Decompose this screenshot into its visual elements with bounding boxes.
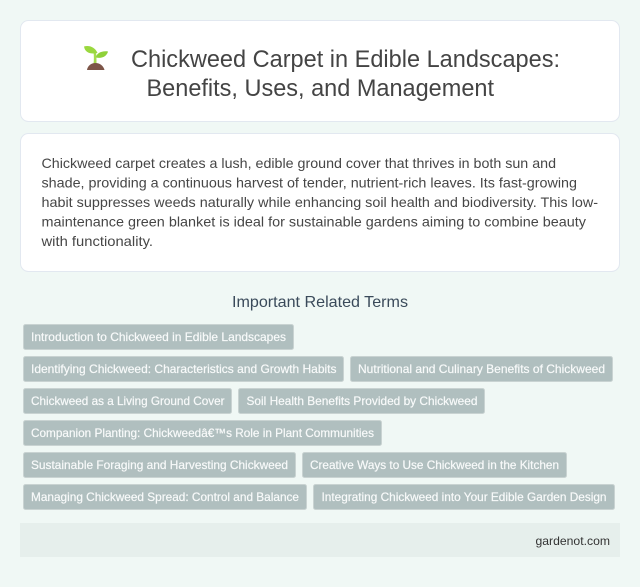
panel: term tags xyxy=(24,324,614,510)
tag: Soil Health Benefits Provided by Chickweed xyxy=(246,394,478,408)
tag xyxy=(238,388,484,414)
description text: habit suppresses weeds naturally while enhancing soil health and biodiversity. This low- xyxy=(42,194,598,210)
description text xyxy=(40,155,598,249)
title text xyxy=(131,46,560,102)
description text: with functionality. xyxy=(40,233,153,249)
description text: maintenance green blanket is ideal for sustainable gardens aiming to combine beauty xyxy=(42,214,586,230)
panel: title card xyxy=(20,20,620,122)
icon: seedling xyxy=(84,46,108,70)
tag: Sustainable Foraging and Harvesting Chickweed xyxy=(31,458,288,472)
tag: Creative Ways to Use Chickweed in the Kitchen xyxy=(310,458,559,472)
footer: gardenot.com xyxy=(536,534,610,548)
tag: Managing Chickweed Spread: Control and Balance xyxy=(31,490,299,504)
tag: Identifying Chickweed: Characteristics and Growth Habits xyxy=(31,362,336,376)
tag xyxy=(24,388,232,414)
footer xyxy=(20,523,620,557)
description text: shade, providing a continuous harvest of tender, nutrient-rich leaves. Its fast-growing xyxy=(42,174,577,190)
title text: Chickweed Carpet in Edible Landscapes: xyxy=(131,46,560,73)
panel: description xyxy=(20,134,620,272)
tag xyxy=(350,356,612,382)
tag xyxy=(24,484,306,510)
tag xyxy=(24,452,296,478)
tag xyxy=(314,484,614,510)
tag: Integrating Chickweed into Your Edible Garden Design xyxy=(322,490,606,504)
tag: Nutritional and Culinary Benefits of Chickweed xyxy=(358,362,605,376)
tag xyxy=(24,420,382,446)
description text: Chickweed carpet creates a lush, edible ground cover that thrives in both sun and xyxy=(42,155,556,171)
title text: Benefits, Uses, and Management xyxy=(146,75,494,102)
heading: related terms: Important Related Terms xyxy=(232,294,408,311)
tag: Companion Planting: Chickweedâ€™s Role in Plant Communities xyxy=(31,426,374,440)
tag: Chickweed as a Living Ground Cover xyxy=(31,394,224,408)
tag xyxy=(302,452,566,478)
tag xyxy=(24,356,344,382)
tag: Introduction to Chickweed in Edible Landscapes xyxy=(31,330,286,344)
tag xyxy=(24,324,294,350)
